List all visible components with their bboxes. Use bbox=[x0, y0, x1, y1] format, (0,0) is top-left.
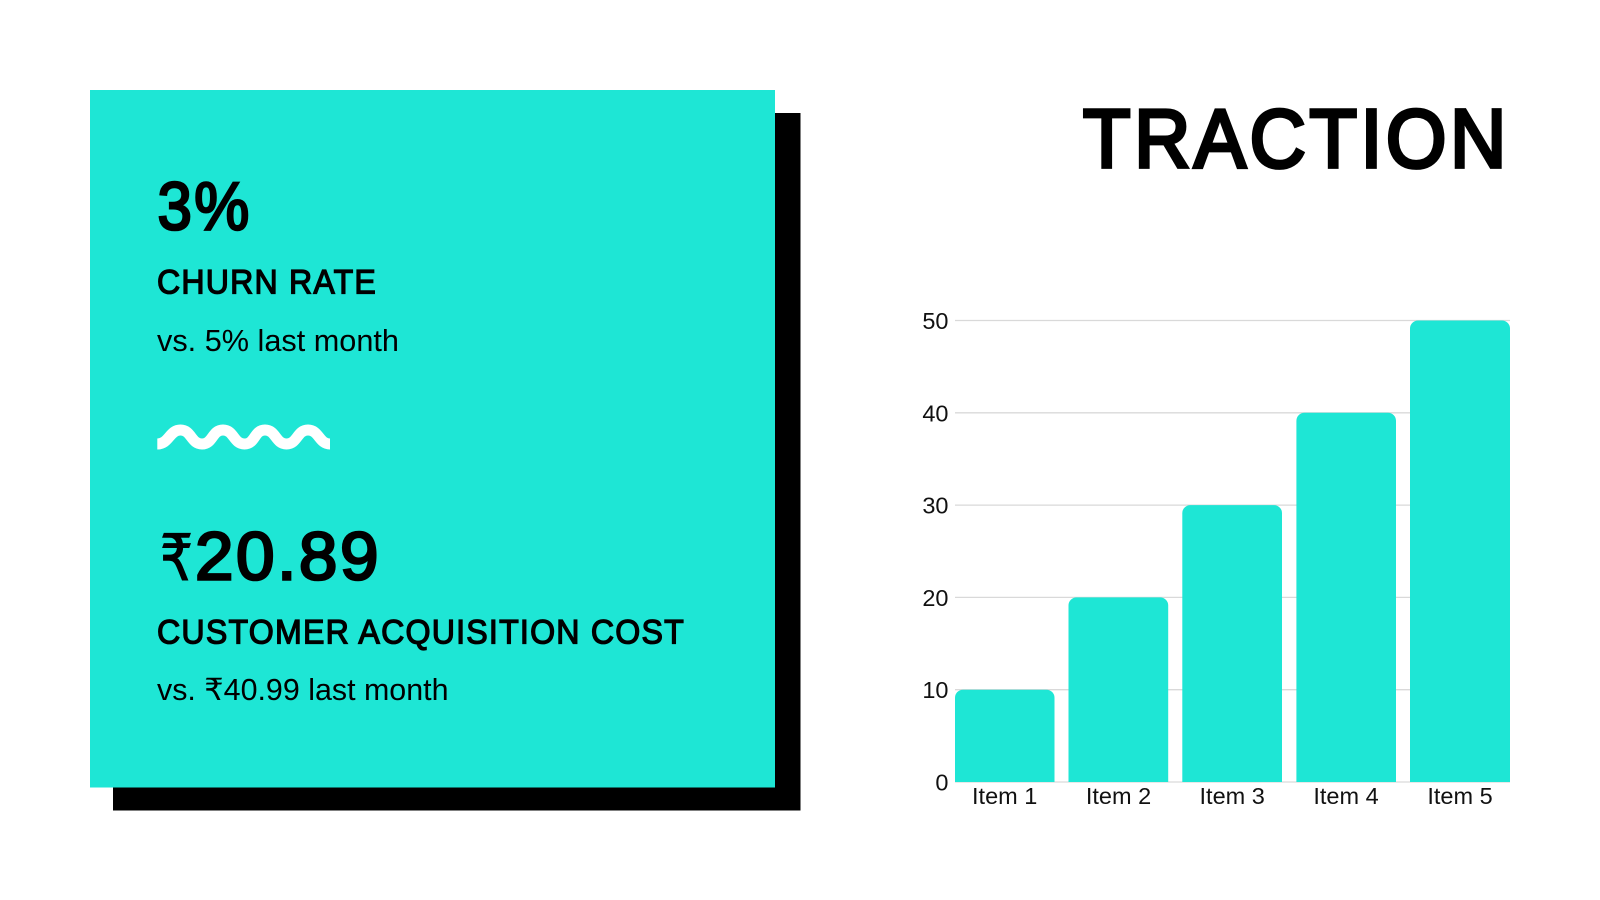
y axis labels: 40 bbox=[922, 400, 948, 426]
icon: white wave divider bbox=[157, 430, 330, 444]
panel: black offset shadow bbox=[113, 113, 800, 810]
y axis labels: 0 bbox=[935, 770, 948, 796]
y axis labels: 50 bbox=[922, 308, 948, 334]
x axis labels: Item 3 bbox=[1200, 783, 1265, 809]
metric value: customer acquisition cost: ₹ bbox=[160, 522, 193, 594]
x axis labels: Item 4 bbox=[1313, 783, 1379, 809]
y axis labels bbox=[922, 308, 948, 796]
x axis labels bbox=[972, 783, 1493, 809]
metric value: churn rate: 3% bbox=[158, 168, 252, 244]
panel: teal metrics card bbox=[90, 90, 775, 788]
bars bbox=[955, 320, 1510, 782]
title: TRACTION bbox=[1083, 92, 1510, 185]
x axis labels: Item 2 bbox=[1086, 783, 1151, 809]
metric label: customer acquisition cost: CUSTOMER ACQUISITION COST bbox=[157, 614, 685, 652]
x axis labels: Item 1 bbox=[972, 783, 1037, 809]
metric label: churn rate: CHURN RATE bbox=[157, 264, 377, 302]
y axis labels: 10 bbox=[922, 677, 948, 703]
metric comparison: customer acquisition cost: vs. ₹40.99 last month bbox=[157, 673, 448, 707]
y axis labels: 30 bbox=[922, 493, 948, 519]
y axis labels: 20 bbox=[922, 585, 948, 611]
x axis labels: Item 5 bbox=[1427, 783, 1493, 809]
metric value: customer acquisition cost: 20.89 bbox=[195, 518, 381, 594]
metric comparison: churn rate: vs. 5% last month bbox=[157, 324, 399, 358]
bar chart bbox=[922, 308, 1510, 809]
